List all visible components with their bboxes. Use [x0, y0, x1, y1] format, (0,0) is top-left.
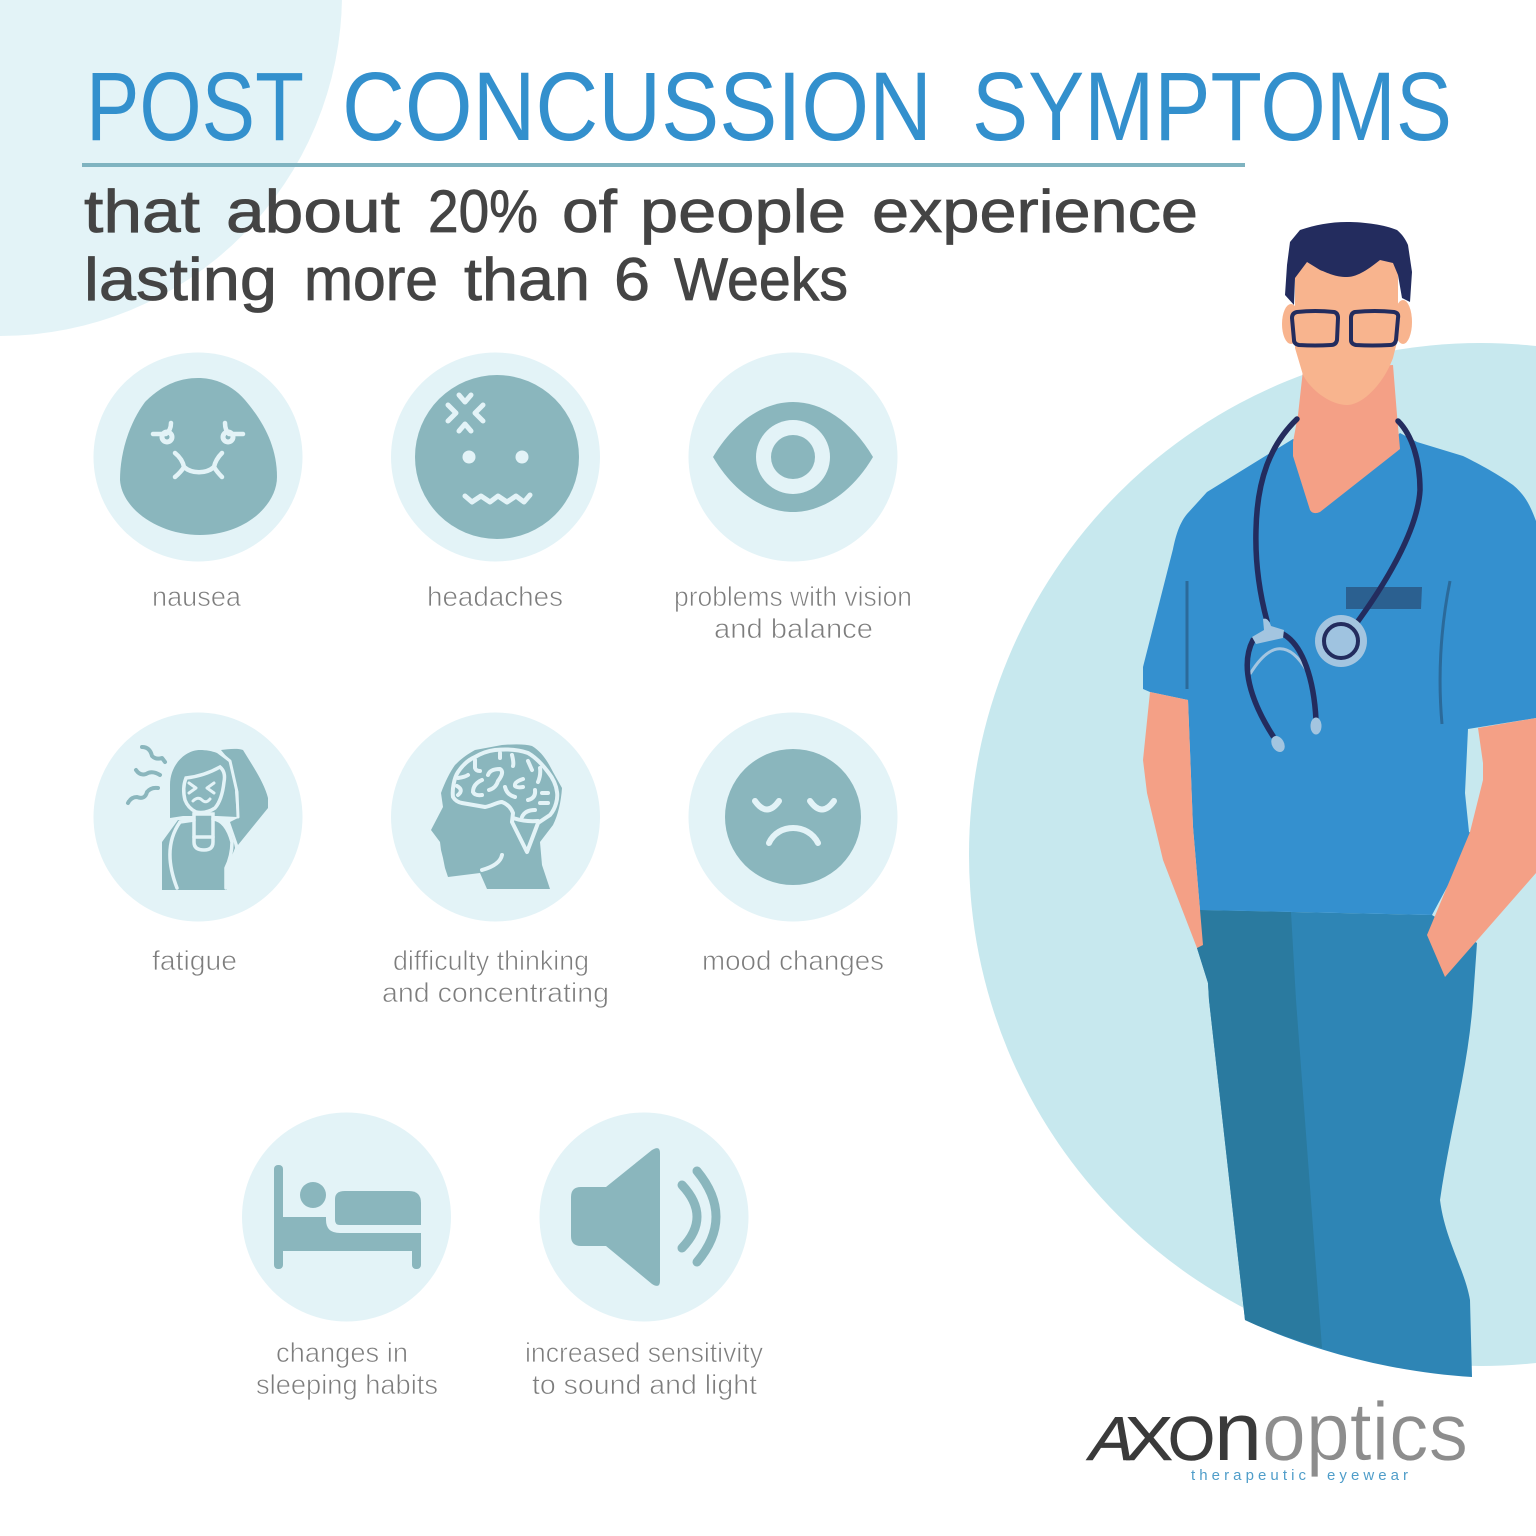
stethoscope — [1247, 419, 1420, 754]
panel: vision and balance — [674, 352, 912, 644]
label — [256, 1337, 438, 1400]
subtitle: 6 — [614, 246, 650, 313]
panel: headaches — [391, 352, 600, 612]
subtitle: lasting — [84, 246, 277, 313]
panel: difficulty thinking — [382, 712, 609, 1008]
subtitle: experience — [872, 178, 1198, 245]
label: headaches — [427, 581, 563, 612]
icon: nauseated face — [120, 378, 277, 535]
panel: fatigue — [94, 712, 302, 976]
subtitle: people — [640, 178, 846, 245]
label: to sound and light — [532, 1369, 757, 1400]
background circle: behind doctor — [969, 343, 1536, 1366]
ears and face — [1282, 260, 1412, 405]
label: difficulty thinking — [393, 945, 589, 976]
title: POST — [86, 52, 304, 161]
background circle: top left — [0, 0, 342, 336]
label — [525, 1337, 763, 1400]
label: and concentrating — [382, 977, 609, 1008]
logo: Axon Optics: X — [1125, 1405, 1173, 1474]
subtitle: Weeks — [674, 246, 848, 313]
icon: headache face — [415, 375, 579, 539]
subtitle: about — [226, 178, 400, 245]
subtitle: more — [304, 246, 438, 313]
subtitle: that — [84, 178, 200, 245]
label: nausea — [152, 581, 241, 612]
label: sleeping habits — [256, 1369, 438, 1400]
label: changes in — [276, 1337, 408, 1368]
label: increased sensitivity — [525, 1337, 763, 1368]
icon: head with brain — [431, 744, 562, 889]
panel: nausea — [94, 352, 302, 612]
title: CONCUSSION — [342, 52, 932, 161]
neck — [1293, 365, 1400, 513]
logo: Axon Optics: therapeutic — [1191, 1467, 1306, 1484]
trousers — [1197, 910, 1477, 1377]
icon: bed — [274, 1165, 421, 1269]
seams and name tag — [1187, 581, 1450, 724]
icon: speaker — [571, 1148, 716, 1286]
logo: Axon Optics: optics — [1262, 1385, 1468, 1478]
label: problems with vision — [674, 581, 912, 612]
illustration: doctor — [1143, 222, 1536, 1377]
logo: Axon Optics: n — [1214, 1385, 1262, 1478]
logo: Axon Optics: O — [1168, 1405, 1215, 1474]
label: fatigue — [152, 945, 237, 976]
icon: eye — [713, 402, 873, 512]
scrub top — [1143, 433, 1536, 915]
logo: Axon Optics: A — [1083, 1405, 1144, 1474]
subtitle: of — [562, 178, 617, 245]
hair — [1285, 222, 1412, 305]
title: SYMPTOMS — [972, 52, 1452, 161]
icon: sad face — [725, 749, 861, 885]
title — [86, 52, 1452, 161]
arms — [1143, 692, 1536, 977]
label: and balance — [714, 613, 873, 644]
label — [674, 581, 912, 644]
logo: Axon Optics — [1083, 1385, 1468, 1484]
subtitle — [84, 178, 1198, 313]
panel: sensitivity to sound and light — [525, 1112, 763, 1400]
subtitle: 20% — [428, 178, 538, 245]
subtitle: than — [464, 246, 590, 313]
label: mood changes — [702, 945, 884, 976]
panel: mood changes — [688, 712, 898, 976]
icon: tired woman — [128, 747, 268, 890]
glasses — [1292, 311, 1398, 346]
logo: Axon Optics: eyewear — [1327, 1467, 1408, 1484]
label — [382, 945, 609, 1008]
panel: sleeping habits — [242, 1112, 451, 1400]
